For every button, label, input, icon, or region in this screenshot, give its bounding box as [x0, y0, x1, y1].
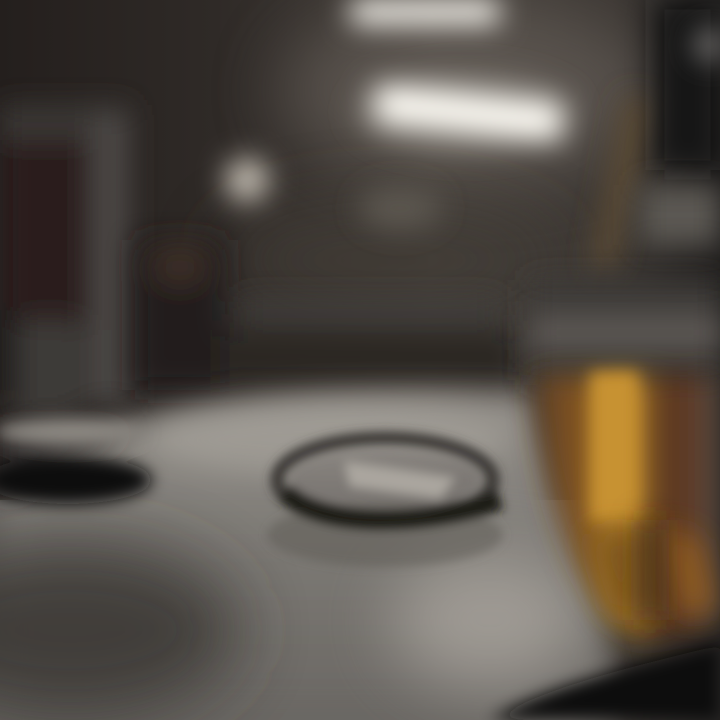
dark foreground shadow	[490, 645, 720, 720]
round lamp glow	[225, 158, 269, 202]
glass jar with amber liquid	[530, 0, 720, 640]
dark object on left of table	[0, 418, 152, 504]
ring on table	[267, 438, 503, 567]
counter and equipment in background	[135, 186, 520, 390]
left cabinet shelf	[0, 105, 130, 420]
ceiling light bar	[353, 70, 577, 154]
ceiling light top	[350, 0, 500, 24]
table surface	[0, 391, 625, 720]
